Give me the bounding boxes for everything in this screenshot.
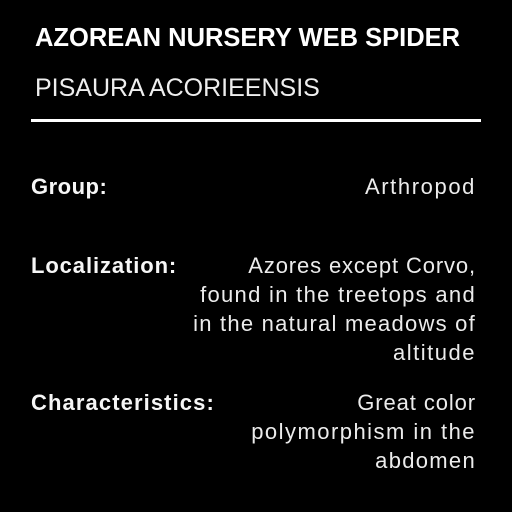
value: localization: found in the treetops and — [200, 282, 476, 307]
label: localization: Localization: — [31, 253, 177, 278]
value: localization — [193, 253, 476, 365]
value: group: Arthropod — [365, 174, 476, 199]
value: localization: altitude — [393, 340, 476, 365]
subtitle: scientific name: PISAURA ACORIEENSIS — [35, 74, 320, 102]
title: AZOREAN NURSERY WEB SPIDER — [35, 24, 460, 52]
value: characteristics: abdomen — [375, 448, 476, 473]
value: localization: in the natural meadows of — [193, 311, 476, 336]
label: characteristics: Characteristics: — [31, 390, 215, 415]
value: characteristics: polymorphism in the — [251, 419, 476, 444]
value: localization: Azores except Corvo, — [248, 253, 476, 278]
value: characteristics — [251, 390, 476, 473]
value: characteristics: Great color — [357, 390, 476, 415]
heading divider — [31, 119, 481, 122]
label: group: Group: — [31, 174, 107, 199]
